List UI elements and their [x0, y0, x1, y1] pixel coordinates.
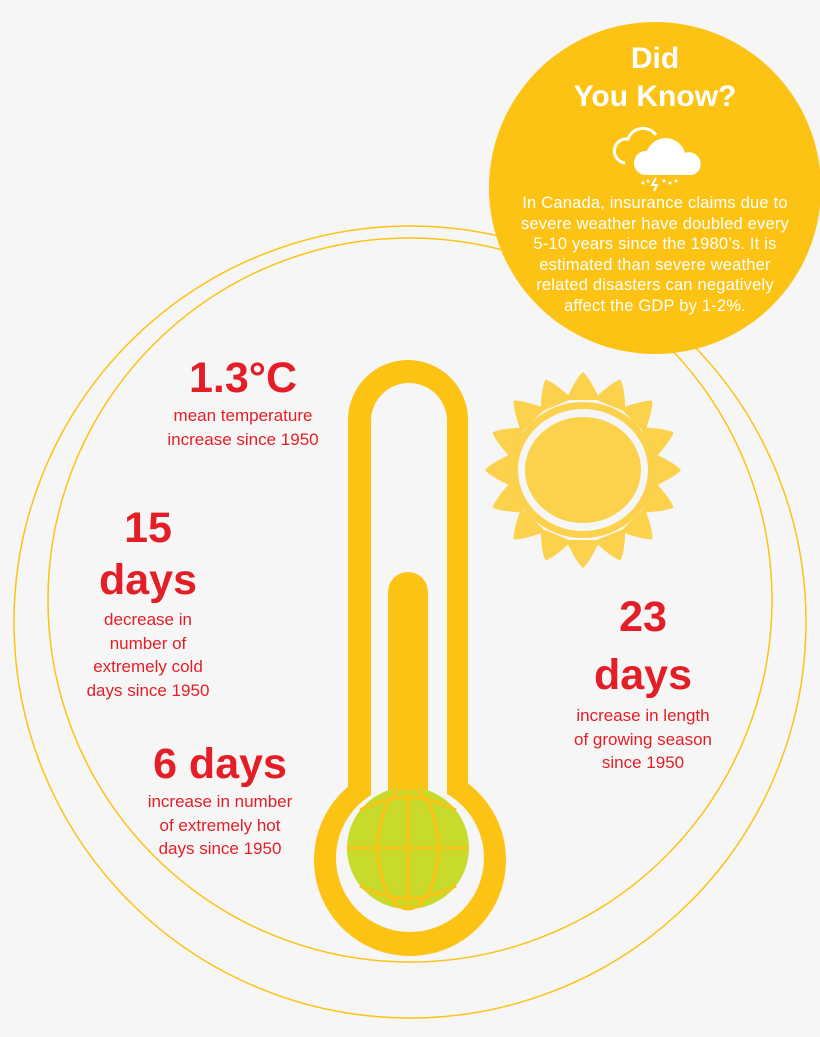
stat: 1.3C: mean temperature	[174, 406, 312, 425]
stat: 23 days: days	[594, 651, 692, 699]
stat: 15 days: 15	[124, 504, 172, 552]
thermometer	[314, 360, 506, 956]
stat: 6 days: of extremely hot	[160, 816, 280, 834]
stat: 6 days	[148, 740, 292, 858]
did you know text: 5-10 years since the 1980’s. It is	[533, 235, 777, 253]
stat: 15 days: days since 1950	[87, 680, 209, 700]
did you know text: related disasters can negatively	[536, 276, 774, 294]
stat: 1.3C	[167, 354, 319, 448]
did you know heading	[574, 42, 736, 113]
stat: 23 days: increase in length	[576, 706, 710, 725]
stat: 15 days: number of	[110, 634, 186, 652]
did you know heading: Did	[631, 42, 679, 75]
stat: 15 days: days	[99, 556, 197, 604]
stat: 23 days	[574, 593, 712, 772]
icon: storm cloud	[614, 128, 701, 191]
stat: 6 days: days since 1950	[159, 839, 281, 858]
stat: 15 days: extremely cold	[93, 657, 203, 676]
icon: sun	[485, 372, 681, 568]
stat: 23 days: 23	[619, 593, 667, 641]
did you know text: severe weather have doubled every	[521, 214, 789, 232]
stat: 15 days	[87, 504, 209, 700]
stat: 6 days: 6 days	[153, 740, 287, 788]
stat: 23 days: since 1950	[602, 753, 684, 772]
stat: 1.3C: increase since 1950	[167, 430, 319, 448]
stat: 1.3C: 1.3°C	[189, 354, 297, 402]
did you know text: In Canada, insurance claims due to	[522, 194, 788, 212]
icon: globe	[347, 787, 469, 909]
did you know text	[521, 194, 789, 314]
did you know text: estimated than severe weather	[539, 256, 771, 274]
did you know heading: You Know?	[574, 80, 736, 113]
did you know circle	[489, 22, 820, 354]
did you know text: affect the GDP by 1-2%.	[564, 296, 746, 314]
stat: 6 days: increase in number	[148, 792, 292, 811]
stat: 15 days: decrease in	[104, 610, 192, 629]
stat: 23 days: of growing season	[574, 730, 712, 748]
